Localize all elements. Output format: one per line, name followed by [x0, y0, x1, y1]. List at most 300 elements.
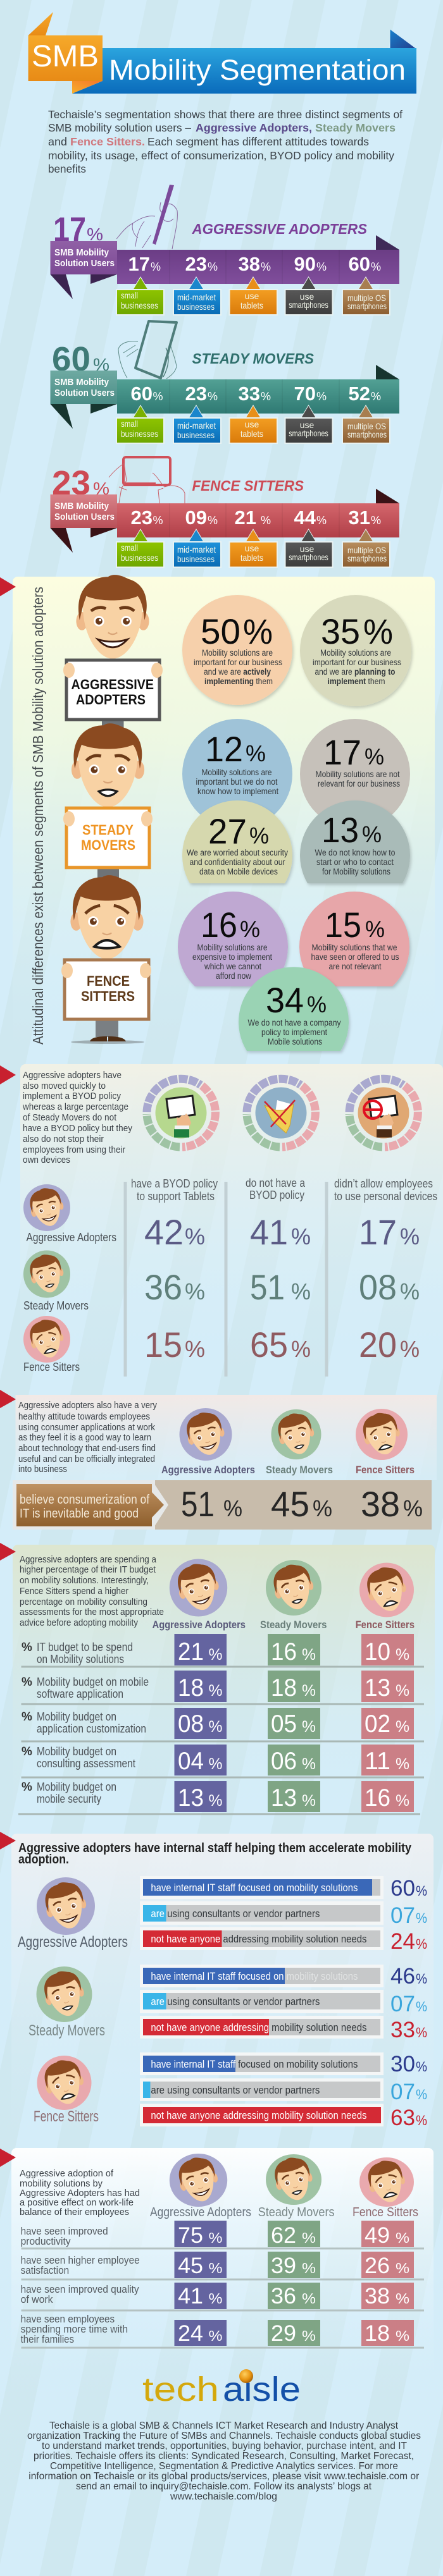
group: fence sitters: % — [416, 2059, 427, 2075]
bubble: 12% do not know how: Mobility solutions are — [201, 768, 272, 777]
bubble: 16% too expensive: % — [240, 916, 260, 942]
row: aggressive adopters: % — [185, 1224, 205, 1249]
character: fence sitter holding sign — [61, 875, 151, 1044]
character: fence sitter holding sign: FENCE — [87, 973, 130, 989]
segment boxes: aggressive adopters: use — [300, 291, 314, 302]
work-life row labels: spending more time with — [21, 2324, 128, 2335]
face: steady mover — [266, 1560, 321, 1616]
segment boxes: steady movers: businesses — [177, 430, 215, 440]
BYOD text block: own devices — [23, 1155, 70, 1165]
segment boxes: fence sitters: businesses — [121, 553, 158, 563]
row: aggressive adopters: 41 — [250, 1212, 288, 1252]
segment: fence sitters: % — [316, 514, 327, 527]
bubble: 27% security worries: We are worried about security — [187, 848, 288, 857]
bubble: 35% planning to implement: and we are planning to — [315, 667, 395, 677]
group: fence sitters: not have anyone addressing mobility solution needs — [151, 2109, 366, 2121]
group: aggressive adopters: % — [416, 1936, 427, 1952]
bubble: 27% security worries: and confidentiality about our — [190, 857, 285, 867]
title banner: Mobility Segmentation — [109, 54, 406, 86]
segment: aggressive adopters: 17 — [53, 211, 86, 248]
segment: steady movers: % — [371, 390, 381, 403]
footer text — [27, 2420, 421, 2502]
group: fence sitters: Fence Sitters — [34, 2108, 99, 2125]
row: aggressive adopters: % — [291, 1224, 311, 1249]
segment: fence sitters: 31 — [349, 506, 370, 529]
row: aggressive adopters — [23, 1184, 420, 1252]
segment labels: Fence Sitters — [353, 2205, 418, 2219]
work-life row labels: productivity — [21, 2236, 71, 2247]
bubble: 12% do not know how: 12 — [205, 729, 243, 769]
bubble: 27% security worries: 27 — [208, 811, 247, 851]
marker arrow — [0, 1543, 16, 1561]
row: fence sitters: 15 — [144, 1325, 182, 1365]
row: aggressive adopters: % — [400, 1224, 420, 1249]
segment boxes: steady movers: smartphones — [347, 429, 387, 439]
row dividers — [22, 2248, 424, 2348]
budget column: steady movers: 05 — [271, 1710, 297, 1738]
consumerization result bar: % — [403, 1495, 423, 1521]
bubble: 16% too expensive: expensive to implement — [192, 952, 272, 962]
work-life column: fence sitters: 26 — [365, 2254, 390, 2278]
marker arrow — [0, 1390, 16, 1408]
segment: aggressive adopters: % — [261, 261, 271, 273]
budget text block: on mobility solutions. Interestingly, — [20, 1575, 149, 1586]
icon: hands holding tablet — [118, 321, 177, 379]
BYOD text block: of Steady Movers do not — [23, 1112, 117, 1123]
consumerization result bar: 38 — [361, 1484, 400, 1524]
logo: techaisle: tech — [142, 2371, 219, 2408]
work-life column: aggressive adopters: % — [209, 2328, 223, 2344]
budget row labels: % — [22, 1710, 32, 1724]
consumerization text block: as they feel it is a good way to learn — [18, 1432, 151, 1443]
bubble: 12% do not know how: important but we do not — [196, 777, 278, 787]
segment boxes: fence sitters: mid-market — [177, 544, 216, 555]
row: steady movers: 08 — [359, 1267, 397, 1307]
work-life column: fence sitters: % — [396, 2260, 409, 2276]
segment: aggressive adopters: % — [87, 224, 103, 244]
bubble: 13% who to contact: We do not know how to — [315, 848, 395, 857]
work-life text block: Aggressive adoption of — [20, 2168, 114, 2179]
segment boxes: fence sitters — [116, 529, 390, 567]
bubble: 34% no company policy: 34 — [266, 980, 304, 1020]
bubble: 34% no company policy: We do not have a company — [248, 1018, 341, 1027]
bubble: 16% too expensive: which we cannot — [204, 962, 261, 971]
consumerization text block: useful and can be officially integrated — [18, 1454, 155, 1464]
bubble: 13% who to contact: for Mobility solutions — [322, 867, 390, 876]
group: fence sitters: 07 — [390, 2080, 415, 2104]
character: aggressive adopter holding sign: ADOPTERS — [76, 692, 146, 708]
bubble: 17% not relevant: Mobility solutions are not — [315, 770, 400, 779]
work-life column: aggressive adopters — [175, 2221, 227, 2346]
character: steady mover holding sign: MOVERS — [81, 837, 135, 853]
segment boxes: aggressive adopters: tablets — [240, 300, 263, 310]
segment boxes: steady movers: mid-market — [177, 420, 216, 431]
BYOD text block: implement a BYOD policy — [23, 1091, 121, 1101]
group: steady movers: 07 — [390, 1992, 415, 2016]
work-life column: fence sitters: % — [396, 2328, 409, 2344]
segment: fence sitters: % — [153, 514, 163, 527]
intro text: benefits — [48, 163, 86, 175]
column headers: do not have a — [246, 1176, 306, 1189]
work-life column: steady movers: 39 — [271, 2254, 296, 2278]
bubble: 15% seen not relevant: have seen or offered to us — [311, 952, 399, 962]
heading: adoption. — [18, 1853, 69, 1867]
segment: fence sitters — [51, 457, 399, 553]
segment: steady movers: 60 — [131, 383, 153, 405]
face: aggressive adopter — [170, 1559, 227, 1616]
bubble: 15% seen not relevant: Mobility solutions that we — [311, 943, 397, 952]
segment boxes: aggressive adopters: mid-market — [177, 292, 216, 302]
budget column: fence sitters — [361, 1634, 414, 1812]
group: fence sitters: have internal IT staff focused on mobility solutions — [151, 2058, 358, 2070]
budget column: aggressive adopters: 18 — [178, 1674, 204, 1702]
footer text: to understand market trends, opportunities, buying behavior, purchase intent, and IT — [42, 2441, 407, 2451]
segment: fence sitters: % — [208, 514, 218, 527]
segment: steady movers — [51, 321, 399, 429]
work-life column: fence sitters: 18 — [365, 2321, 390, 2346]
segment: fence sitters: 23 — [52, 464, 90, 502]
row: steady movers: % — [400, 1279, 420, 1304]
budget row labels: % — [22, 1641, 32, 1654]
segment: fence sitters: FENCE SITTERS — [192, 477, 304, 494]
panel: internal staff — [0, 1832, 434, 2144]
segment boxes: fence sitters: use — [245, 543, 259, 553]
segment labels — [150, 2205, 418, 2219]
face: fence sitter — [356, 1409, 408, 1460]
work-life column: aggressive adopters: 75 — [178, 2223, 203, 2248]
work-life column: steady movers: % — [302, 2328, 316, 2344]
footer text: www.techaisle.com/blog — [170, 2491, 277, 2502]
footer text: organization Tracking the Future of SMBs and Channels. Techaisle conducts global studies — [27, 2431, 421, 2441]
segment: steady movers: 70 — [294, 383, 316, 405]
group: steady movers: Steady Movers — [28, 2022, 105, 2039]
budget text block: Fence Sitters spend a higher — [20, 1586, 128, 1597]
budget column: aggressive adopters: % — [209, 1755, 223, 1773]
work-life column: steady movers: 29 — [271, 2321, 296, 2346]
segment labels: Aggressive Adopters — [150, 2205, 251, 2219]
segment boxes: fence sitters: use — [300, 544, 314, 554]
bubble: 27% security worries — [182, 800, 292, 883]
row: aggressive adopters: 42 — [144, 1212, 184, 1252]
BYOD text block: employees from using their — [23, 1144, 125, 1155]
bubble: 16% too expensive: afford now — [216, 971, 251, 981]
group: aggressive adopters: 60 — [390, 1876, 415, 1901]
budget column: aggressive adopters: 04 — [178, 1748, 204, 1775]
face: aggressive adopter — [170, 2154, 227, 2207]
segment: steady movers: % — [208, 390, 218, 403]
budget column: steady movers: % — [302, 1682, 316, 1700]
budget text block: advice before adopting mobility — [20, 1617, 138, 1628]
consumerization result bar: 51 — [181, 1484, 215, 1524]
budget column: aggressive adopters: 13 — [178, 1784, 204, 1812]
work-life row labels: have seen improved — [21, 2226, 108, 2237]
segment: fence sitters: SMB Mobility — [54, 501, 109, 512]
segment labels — [153, 1619, 415, 1631]
segment: aggressive adopters: % — [151, 261, 161, 273]
budget column: aggressive adopters: % — [209, 1646, 223, 1664]
bubble: 17% not relevant — [300, 719, 410, 829]
bubble: 50% actively implementing: 50 — [201, 611, 240, 651]
work-life column: steady movers — [268, 2221, 320, 2346]
work-life column: fence sitters: 49 — [365, 2223, 390, 2248]
group: fence sitters: are using consultants or vendor partners — [151, 2084, 320, 2096]
heading — [18, 1841, 412, 1867]
vertical heading: Attitudinal differences exist between segments of SMB Mobility solution adopters — [30, 587, 46, 1045]
work-life row labels: their families — [21, 2334, 74, 2345]
budget column: steady movers: % — [302, 1755, 316, 1773]
intro text: Fence Sitters. — [70, 135, 145, 148]
bubble: 34% no company policy: % — [307, 991, 327, 1017]
segment: aggressive adopters: 60 — [349, 253, 370, 275]
segment boxes: fence sitters: smartphones — [289, 552, 328, 562]
group: aggressive adopters: have internal IT staff focused on mobility solutions — [151, 1882, 358, 1894]
work-life column: steady movers: % — [302, 2260, 316, 2276]
bubble: 16% too expensive: Mobility solutions are — [197, 943, 267, 952]
segment: steady movers: SMB Mobility — [54, 377, 109, 388]
budget column: fence sitters: % — [396, 1682, 409, 1700]
column headers — [131, 1176, 437, 1203]
footer text: information on Techaisle or its global products/services, please visit www.techaisle.com or — [28, 2471, 420, 2482]
segment: steady movers: % — [316, 390, 327, 403]
segment: steady movers: Solution Users — [54, 388, 115, 398]
budget column: steady movers — [268, 1634, 320, 1812]
group: aggressive adopters: 24 — [390, 1929, 415, 1954]
bubble: 34% no company policy: policy to implement — [261, 1027, 327, 1037]
segment boxes: steady movers — [116, 405, 390, 443]
column dividers — [125, 1182, 327, 1377]
segment labels: Aggressive Adopters — [161, 1464, 255, 1476]
row: steady movers: 51 — [250, 1267, 285, 1307]
bubble: 17% not relevant: relevant for our business — [318, 779, 400, 788]
work-life row labels: have seen improved quality — [21, 2284, 139, 2295]
icon: hands holding phone — [116, 185, 177, 249]
group: aggressive adopters: not have anyone addressing mobility solution needs — [151, 1933, 366, 1945]
bubble: 16% too expensive — [178, 892, 288, 986]
marker arrow — [0, 1065, 16, 1084]
work-life column: fence sitters — [361, 2221, 414, 2346]
work-life row labels: have seen employees — [21, 2314, 115, 2325]
budget column: steady movers: 18 — [271, 1674, 297, 1702]
bubble: 15% seen not relevant: are not relevant — [329, 962, 382, 971]
BYOD text block: whereas a large percentage — [22, 1101, 128, 1112]
budget column: fence sitters: % — [396, 1792, 409, 1810]
bubble: 50% actively implementing: Mobility solutions are — [202, 648, 273, 658]
segment: steady movers: 33 — [239, 383, 260, 405]
bubble: 35% planning to implement: 35 — [321, 611, 360, 651]
BYOD text block: have a BYOD policy but they — [23, 1123, 132, 1134]
intro text: Aggressive Adopters, — [196, 121, 312, 134]
segment boxes: steady movers: businesses — [121, 429, 158, 439]
budget row labels: Mobility budget on mobile — [37, 1676, 149, 1688]
intro text: Each segment has different attitudes towards — [147, 135, 369, 148]
segment boxes: fence sitters: tablets — [240, 553, 263, 563]
work-life text block: balance of their employees — [20, 2207, 129, 2217]
budget column: fence sitters: 13 — [365, 1674, 390, 1702]
segment boxes: steady movers: use — [300, 420, 314, 430]
face: aggressive adopter — [180, 1408, 232, 1461]
group: aggressive adopters — [18, 1876, 427, 1954]
intro text: and — [48, 135, 67, 148]
bubble: 50% actively implementing: and we are actively — [204, 667, 271, 677]
logo: techaisle — [142, 2369, 301, 2408]
marker arrow — [0, 2149, 16, 2167]
consumerization text block: about technology that end-users find — [18, 1443, 156, 1454]
group: aggressive adopters: % — [416, 1883, 427, 1899]
title banner: SMB — [32, 40, 99, 73]
bubble: 35% planning to implement: important for our business — [313, 658, 401, 667]
panel: IT budget — [0, 1543, 435, 1823]
segment labels: Steady Movers — [260, 1619, 327, 1631]
row: fence sitters: % — [291, 1336, 311, 1362]
work-life column: aggressive adopters: % — [209, 2290, 223, 2307]
segment: fence sitters: % — [261, 514, 271, 527]
segment: aggressive adopters — [51, 185, 399, 299]
group: aggressive adopters: are using consultants or vendor partners — [151, 1908, 320, 1920]
budget column: steady movers: 13 — [271, 1784, 297, 1812]
segment: steady movers: % — [261, 390, 271, 403]
segment boxes: aggressive adopters — [116, 277, 390, 315]
budget column: aggressive adopters — [175, 1634, 227, 1812]
group: aggressive adopters: % — [416, 1910, 427, 1926]
bubble: 17% not relevant: % — [365, 744, 384, 770]
budget column: aggressive adopters: % — [209, 1792, 223, 1810]
segment boxes: aggressive adopters: smartphones — [347, 301, 387, 311]
segment boxes: steady movers: tablets — [240, 429, 263, 439]
icon: hands holding landscape tablet — [109, 457, 185, 503]
bubble: 15% seen not relevant: % — [365, 916, 385, 942]
budget column: steady movers: % — [302, 1646, 316, 1664]
budget text block — [20, 1554, 164, 1628]
budget column: fence sitters: 11 — [365, 1748, 390, 1775]
group: fence sitters — [34, 2052, 427, 2130]
character: aggressive adopter holding sign — [63, 575, 163, 728]
row: steady movers — [23, 1251, 420, 1312]
bubble: 34% no company policy: Mobile solutions — [268, 1037, 322, 1046]
footer text: Techaisle is a global SMB & Channels ICT Market Research and Industry Analyst — [49, 2420, 399, 2431]
bubble: 15% seen not relevant: 15 — [325, 905, 361, 945]
segment: aggressive adopters: AGGRESSIVE ADOPTERS — [192, 221, 368, 237]
bubble: 50% actively implementing: % — [243, 611, 273, 651]
face: steady mover — [271, 1409, 321, 1459]
bubble: 16% too expensive: 16 — [201, 905, 237, 945]
segment boxes: fence sitters: multiple OS — [347, 545, 386, 555]
segment: aggressive adopters: % — [371, 261, 381, 273]
panel: work-life balance — [0, 2148, 434, 2401]
row: fence sitters: Fence Sitters — [23, 1361, 80, 1373]
consumerization result bar: % — [223, 1495, 242, 1521]
work-life column: fence sitters: % — [396, 2229, 409, 2246]
bubble: 15% seen not relevant — [299, 892, 409, 986]
group: fence sitters: 30 — [390, 2052, 415, 2076]
row: fence sitters: 65 — [250, 1325, 288, 1365]
group: fence sitters: % — [416, 2113, 427, 2128]
footer text: priorities. Techaisle offers its clients: Syndicated Research, Consulting, Market Forecast, — [34, 2451, 414, 2462]
segment labels: Steady Movers — [258, 2205, 335, 2219]
bubble: 35% planning to implement: implement them — [328, 677, 385, 686]
budget row labels: software application — [37, 1688, 123, 1700]
consumerization result bar — [13, 1480, 432, 1530]
face: steady mover — [266, 2154, 321, 2205]
segment boxes: steady movers: smartphones — [289, 428, 328, 438]
title banner — [28, 12, 416, 94]
segment boxes: aggressive adopters: small — [121, 290, 138, 300]
segment: steady movers: 52 — [349, 383, 370, 405]
intro text: Steady Movers — [315, 121, 396, 134]
segment boxes: aggressive adopters: businesses — [121, 300, 158, 310]
work-life column: steady movers: % — [302, 2229, 316, 2246]
segment: aggressive adopters: Solution Users — [54, 259, 115, 269]
bubble: 50% actively implementing — [182, 595, 292, 705]
bubble: 50% actively implementing: implementing them — [204, 677, 273, 686]
segment: aggressive adopters: 90 — [294, 253, 316, 275]
work-life column: aggressive adopters: % — [209, 2260, 223, 2276]
budget row labels: on Mobility solutions — [37, 1653, 124, 1665]
budget row labels: % — [22, 1745, 32, 1758]
row: steady movers: % — [185, 1279, 205, 1304]
row: steady movers: Steady Movers — [23, 1299, 89, 1312]
segment labels: Fence Sitters — [356, 1464, 415, 1476]
consumerization result bar: IT is inevitable and good — [20, 1507, 139, 1521]
segment: aggressive adopters: % — [316, 261, 327, 273]
work-life column: steady movers: 62 — [271, 2223, 296, 2248]
budget column: fence sitters: % — [396, 1718, 409, 1736]
budget row labels: Mobility budget on — [37, 1781, 116, 1793]
budget column: aggressive adopters: 21 — [178, 1638, 204, 1665]
segment: aggressive adopters: % — [208, 261, 218, 273]
row: steady movers: % — [291, 1279, 311, 1304]
segment: fence sitters: 09 — [185, 506, 207, 529]
consumerization text block: Aggressive adopters also have a very — [18, 1400, 157, 1411]
segment boxes: fence sitters: smartphones — [347, 553, 387, 563]
work-life text block: Aggressive Adopters has had — [20, 2188, 140, 2199]
budget column: steady movers: 06 — [271, 1748, 297, 1775]
work-life column: aggressive adopters: 24 — [178, 2321, 203, 2346]
bubble: 13% who to contact: 13 — [321, 810, 359, 850]
segment: steady movers: STEADY MOVERS — [192, 350, 315, 367]
BYOD text block — [22, 1070, 132, 1165]
intro text: mobility, its usage, effect of consumerization, BYOD policy and mobility — [48, 149, 394, 162]
segment: aggressive adopters: 38 — [239, 253, 260, 275]
group: steady movers: have internal IT staff focused on mobility solutions — [151, 1970, 358, 1982]
work-life row labels — [21, 2226, 140, 2345]
budget column: aggressive adopters: % — [209, 1682, 223, 1700]
row: fence sitters — [23, 1316, 420, 1373]
segment labels: Steady Movers — [266, 1464, 333, 1476]
work-life row labels: have seen higher employee — [21, 2255, 140, 2266]
work-life text block — [20, 2168, 140, 2217]
row dividers — [18, 1667, 424, 1814]
consumerization text block: into business — [18, 1464, 67, 1475]
group: steady movers: % — [416, 1999, 427, 2015]
segment boxes: steady movers: multiple OS — [347, 421, 386, 431]
segment boxes: aggressive adopters: businesses — [177, 302, 215, 312]
panel: BYOD policy — [0, 1064, 443, 1380]
budget row labels: % — [22, 1676, 32, 1689]
row: steady movers: 36 — [144, 1267, 182, 1307]
segment labels — [161, 1464, 415, 1476]
group: aggressive adopters: Aggressive Adopters — [18, 1934, 128, 1951]
budget text block: assessments for the most appropriate — [20, 1607, 164, 1617]
work-life column: aggressive adopters: 45 — [178, 2254, 203, 2278]
consumerization text block: using consumer applications at work — [18, 1422, 155, 1433]
intro text: Techaisle’s segmentation shows that there are three distinct segments of — [48, 108, 402, 121]
footer text: Competitive Intelligence, Segmentation & Predictive Analytics services. For more — [50, 2461, 398, 2472]
budget column: steady movers: % — [302, 1718, 316, 1736]
group: steady movers: 46 — [390, 1964, 415, 1989]
budget row labels: Mobility budget on — [37, 1710, 116, 1723]
row: aggressive adopters: 17 — [359, 1212, 397, 1252]
heading: Aggressive adopters have internal staff helping them accelerate mobility — [18, 1841, 412, 1855]
